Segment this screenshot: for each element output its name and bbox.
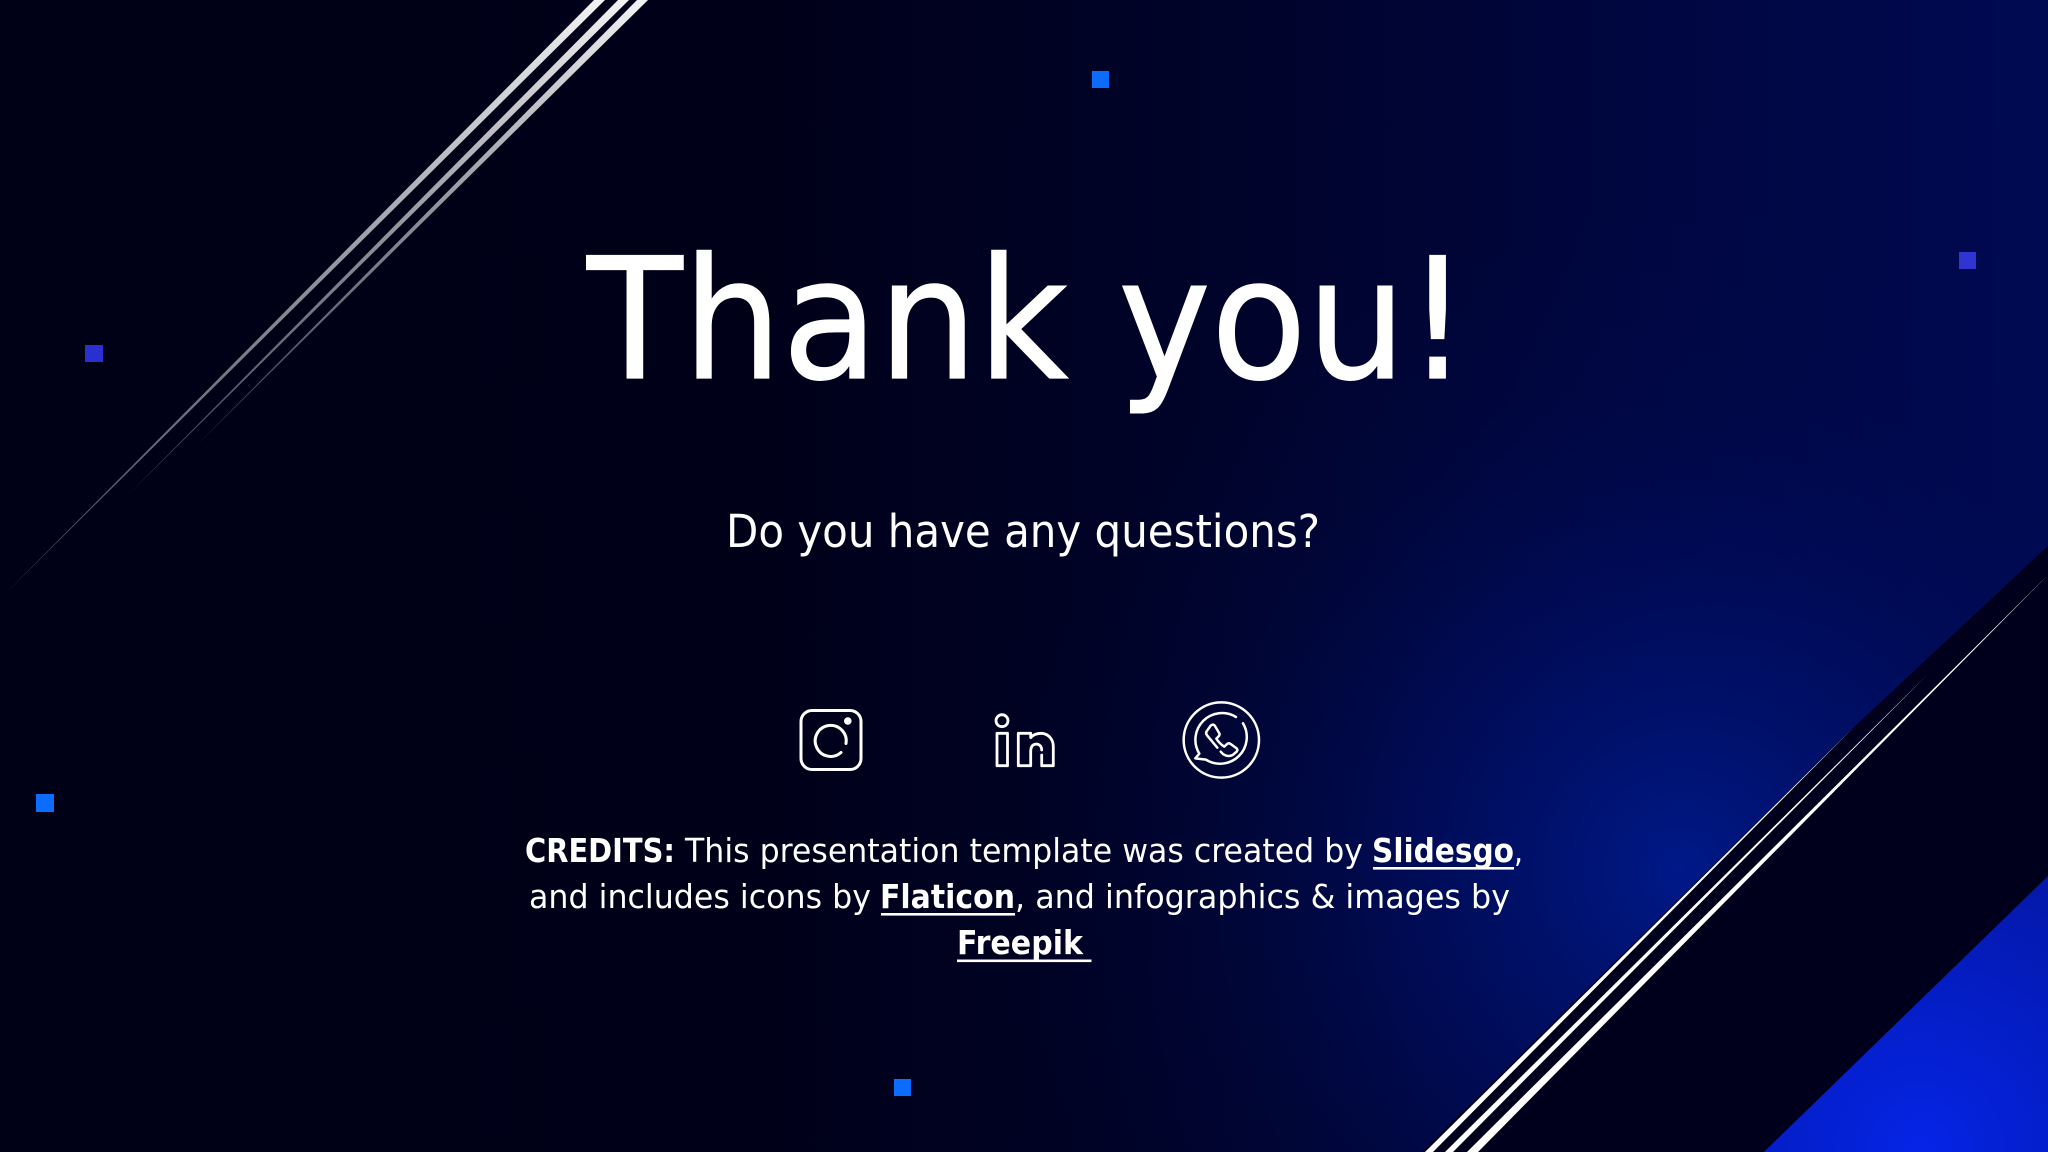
credits text: Freepik bbox=[957, 923, 1084, 962]
decorative square: lower left bbox=[36, 794, 54, 812]
decorative square: right bbox=[1959, 252, 1976, 269]
bright blue corner: bottom right bbox=[1764, 876, 2048, 1152]
diagonal white lines: top left bbox=[4, 0, 648, 595]
credits text: Slidesgo bbox=[1372, 831, 1514, 870]
icon: whatsapp bbox=[1184, 702, 1259, 778]
dark diagonal band: bottom right bbox=[1422, 546, 2048, 1152]
subtitle: Do you have any questions? bbox=[726, 505, 1320, 558]
credits text: CREDITS: bbox=[525, 831, 675, 870]
credits text: , and infographics & images by bbox=[1015, 877, 1510, 916]
icon: linkedin bbox=[996, 715, 1053, 766]
decorative square: bottom centre bbox=[894, 1079, 911, 1096]
diagonal white lines: bottom right bbox=[1425, 575, 2048, 1152]
decorative square: top centre bbox=[1092, 71, 1109, 88]
credits text: and includes icons by bbox=[529, 877, 871, 916]
credits text: , bbox=[1514, 831, 1523, 870]
title: Thank you! bbox=[586, 222, 1469, 418]
credits text: Flaticon bbox=[880, 877, 1015, 916]
credits text bbox=[525, 831, 1523, 962]
icon: instagram bbox=[801, 710, 861, 770]
decorative square: left bbox=[85, 345, 103, 362]
credits text: This presentation template was created by bbox=[684, 831, 1363, 870]
